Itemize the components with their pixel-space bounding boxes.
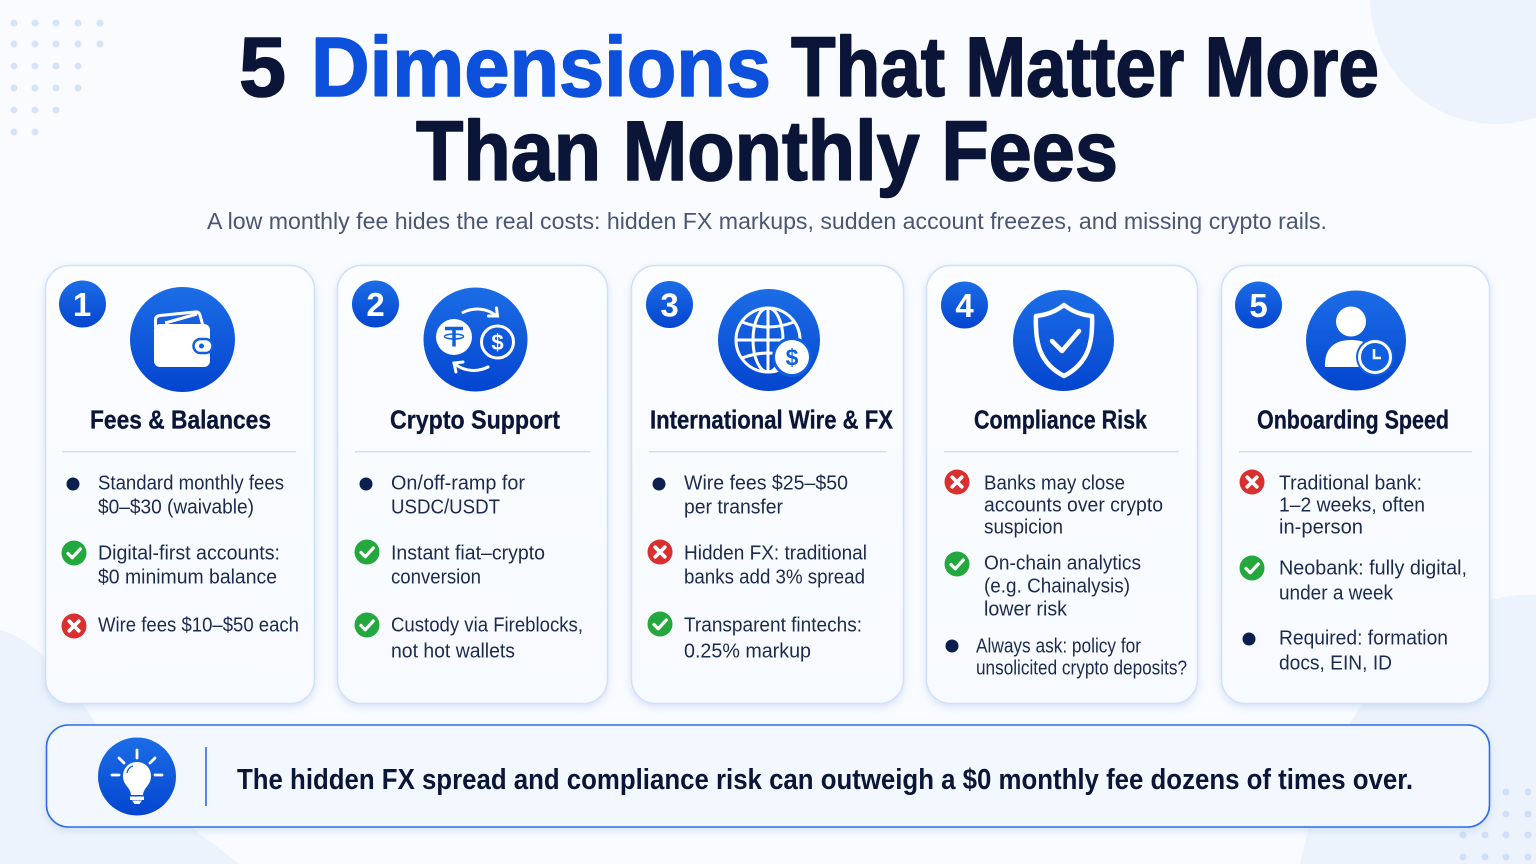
item: on-chain analytics: [944, 552, 1141, 620]
icon: globe with dollar: $: [786, 344, 799, 370]
panel: crypto support: [338, 266, 608, 704]
title: [239, 20, 1379, 198]
badge 5: [1235, 282, 1282, 328]
item: always ask: [946, 636, 1187, 680]
item: instant conversion: conversion: [391, 566, 481, 588]
item: always ask: unsolicited crypto deposits?: [976, 658, 1187, 680]
title: 5: [239, 20, 286, 114]
icon: crypto exchange: [424, 288, 528, 392]
item: digital-first accounts: Digital-first accounts:: [98, 542, 280, 564]
badge 4: 4: [955, 287, 974, 324]
item: custody: Custody via Fireblocks,: [391, 614, 583, 636]
badge 1: 1: [73, 286, 91, 323]
badge 2: 2: [366, 286, 385, 323]
panel: fees and balances: [46, 266, 314, 704]
item: transparent fintechs: 0.25% markup: [684, 640, 811, 662]
item: required documents: Required: formation: [1279, 628, 1448, 650]
title: That Matter More: [791, 20, 1379, 114]
item: custody: not hot wallets: [391, 640, 515, 662]
item: required documents: docs, EIN, ID: [1279, 652, 1392, 674]
title: Than Monthly Fees: [416, 104, 1118, 198]
item: on/off-ramp: USDC/USDT: [391, 496, 500, 518]
item: instant conversion: Instant fiat–crypto: [391, 542, 545, 564]
item: standard monthly fees: Standard monthly fees: [98, 472, 284, 494]
badge 3: 3: [660, 286, 679, 324]
item: on-chain analytics: lower risk: [984, 598, 1068, 620]
item: hidden fx: Hidden FX: traditional: [684, 542, 867, 564]
item: on/off-ramp: [360, 472, 525, 518]
item: digital-first accounts: $0 minimum balance: [98, 566, 277, 588]
badge 4: [941, 282, 988, 328]
heading: onboarding speed: Onboarding Speed: [1257, 404, 1449, 434]
item: banks may close: [944, 470, 1163, 538]
item: banks may close: accounts over crypto: [984, 494, 1163, 516]
panel: onboarding speed: [1222, 266, 1490, 704]
decorative dots: bottom right: [1460, 788, 1532, 860]
icon: light bulb: [98, 738, 176, 816]
item: wire fees: [652, 472, 848, 518]
item: transparent fintechs: [648, 612, 862, 662]
item: banks may close: Banks may close: [984, 472, 1125, 494]
icon: shield: [1013, 290, 1114, 391]
icon: wallet: [130, 287, 235, 392]
badge 3: [646, 281, 693, 328]
badge 1: [59, 280, 106, 328]
heading: compliance risk: Compliance Risk: [974, 404, 1147, 434]
panel: international wire and fx: [632, 266, 904, 704]
item: traditional bank: in-person: [1279, 516, 1363, 538]
item: standard monthly fees: $0–$30 (waivable): [98, 496, 254, 518]
decorative dots: top left: [10, 20, 104, 136]
item: always ask: Always ask: policy for: [976, 636, 1141, 658]
panel: compliance risk: [926, 266, 1198, 704]
badge 2: [352, 280, 399, 328]
heading: international wire and fx: International Wire & FX: [650, 404, 894, 434]
item: neobank: Neobank: fully digital,: [1279, 558, 1467, 580]
subtitle: A low monthly fee hides the real costs: hidden FX markups, sudden account freezes, and missing crypto rails.: [207, 208, 1327, 234]
icon: person with clock: [1306, 290, 1406, 390]
heading: fees and balances: Fees & Balances: [90, 404, 271, 434]
item: wire fees: per transfer: [684, 496, 783, 518]
item: transparent fintechs: Transparent fintechs:: [684, 614, 862, 636]
item: neobank: [1240, 556, 1467, 604]
title: Dimensions: [311, 20, 771, 114]
icon: crypto exchange: $: [491, 330, 504, 355]
icon: globe with dollar: [718, 289, 820, 391]
item: hidden fx: banks add 3% spread: [684, 566, 865, 588]
item: on-chain analytics: On-chain analytics: [984, 552, 1141, 574]
item: custody: [354, 612, 583, 662]
item: banks may close: suspicion: [984, 516, 1063, 538]
callout: [46, 725, 1490, 827]
item: wire fees: Wire fees $10–$50 each: [98, 614, 299, 636]
item: on/off-ramp: On/off-ramp for: [391, 472, 525, 494]
callout text: The hidden FX spread and compliance risk can outweigh a $0 monthly fee dozens of times over.: [237, 764, 1413, 796]
item: instant conversion: [354, 540, 545, 588]
item: standard monthly fees: [66, 472, 284, 518]
item: digital-first accounts: [62, 540, 280, 588]
item: traditional bank: 1–2 weeks, often: [1279, 494, 1425, 516]
item: on-chain analytics: (e.g. Chainalysis): [984, 576, 1130, 598]
heading: crypto support: Crypto Support: [390, 404, 560, 434]
item: required documents: [1242, 628, 1448, 674]
item: neobank: under a week: [1279, 582, 1394, 604]
badge 5: 5: [1249, 287, 1268, 324]
item: wire fees: Wire fees $25–$50: [684, 472, 848, 494]
item: hidden fx: [648, 540, 867, 588]
item: traditional bank: Traditional bank:: [1279, 472, 1422, 494]
item: traditional bank: [1240, 470, 1425, 538]
